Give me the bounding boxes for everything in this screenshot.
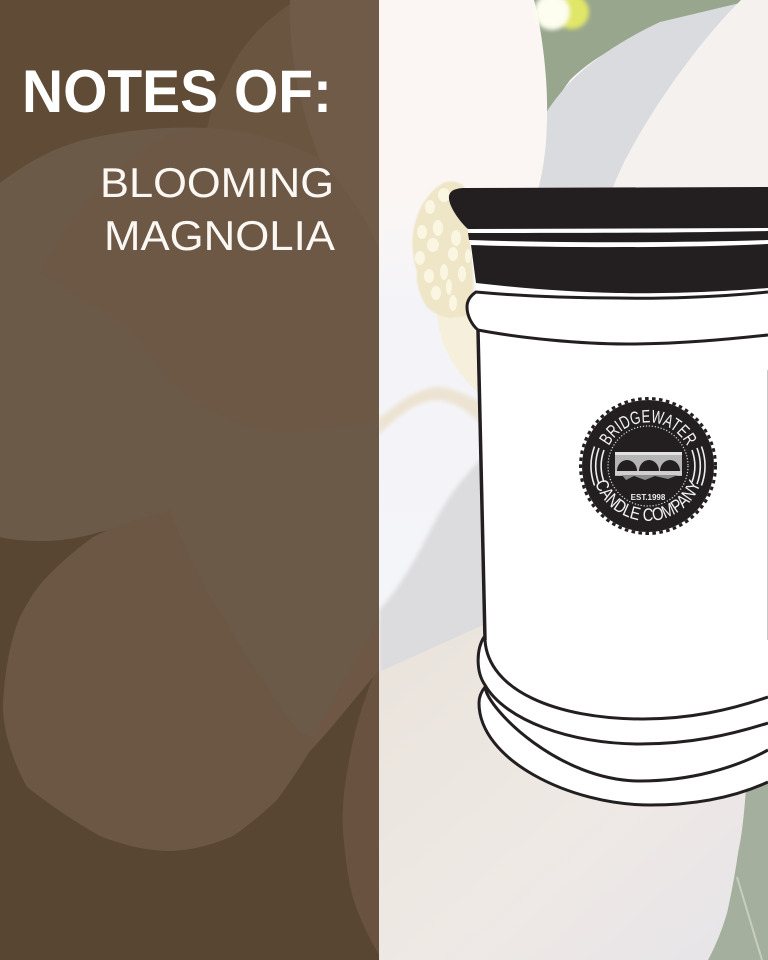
brand logo badge (579, 397, 717, 535)
photo base (379, 0, 768, 960)
base ring three (479, 687, 768, 805)
panel base (0, 510, 379, 960)
large lower petal (3, 510, 313, 851)
lower right strip (356, 626, 379, 698)
jar body bottom curve (485, 640, 768, 719)
stamen cluster (412, 181, 474, 318)
green foliage top (530, 0, 745, 114)
grey petal shadow (379, 458, 490, 690)
badge brand name bottom: CANDLE COMPANY (596, 479, 700, 521)
green foliage bottom right (708, 770, 768, 960)
base ring one (478, 637, 768, 744)
badge teeth (580, 398, 716, 534)
beige lower petal (379, 618, 768, 960)
upper right petal (207, 4, 320, 159)
bokeh highlight (534, 0, 589, 30)
side stripes (591, 446, 705, 486)
right white petal (612, 0, 768, 190)
lid top (449, 187, 768, 229)
magnolia photo background (378, 0, 768, 960)
middle right petal (168, 420, 380, 737)
lid seal band (468, 231, 768, 242)
base ring two (485, 687, 768, 781)
stamen cone (437, 305, 484, 394)
candle jar illustration (449, 187, 768, 805)
jar body left edge (478, 330, 485, 640)
jar white base (467, 228, 768, 805)
grey back petal (535, 3, 740, 190)
dotted ring (608, 426, 688, 506)
large left petal (0, 128, 280, 541)
left white petal (379, 0, 547, 640)
right label edge (766, 370, 768, 640)
upper far right petal tone (290, 0, 296, 4)
title: notes of: NOTES OF: (22, 58, 332, 125)
upper dark petal area (0, 0, 379, 300)
scent line one: BLOOMING (100, 159, 334, 206)
lid lower band (471, 244, 768, 293)
bottom corner petal (343, 660, 380, 956)
badge disc (582, 400, 714, 532)
badge established date: EST.1998 (631, 493, 666, 502)
jar shoulder outline (467, 292, 768, 344)
badge brand name top: BRIDGEWATER (599, 410, 696, 446)
scent name (100, 159, 335, 259)
brown overlay panel (0, 0, 380, 960)
lower petal crease (378, 387, 482, 436)
bridge emblem (615, 452, 682, 480)
scent line two: MAGNOLIA (104, 212, 335, 259)
upper middle petal (40, 128, 380, 432)
